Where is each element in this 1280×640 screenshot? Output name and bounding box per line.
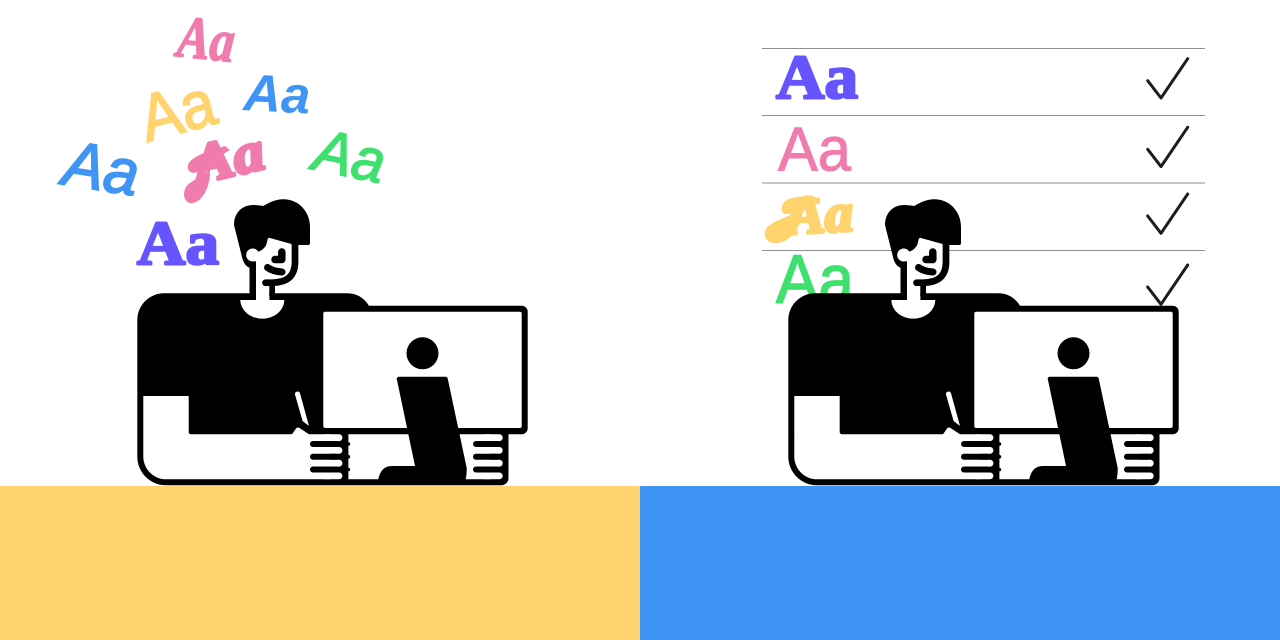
monitor screen: [974, 312, 1173, 428]
ear: [246, 248, 259, 262]
sample: yellow sans: Aa: [131, 65, 223, 156]
sample: blue italic: Aa: [55, 126, 144, 210]
mouth: [918, 268, 933, 272]
right color band: [640, 486, 1280, 640]
neck outline: [900, 262, 907, 296]
stylus: [295, 392, 309, 426]
desk gap: [348, 434, 490, 479]
floating font samples: [55, 3, 391, 278]
collar neck opening: [256, 296, 269, 302]
monitor stand: [1029, 377, 1118, 485]
right hand finger gaps: [1127, 444, 1148, 470]
left hand fingers: [976, 438, 990, 476]
left hand finger gaps: [313, 444, 336, 470]
face and neck: [253, 238, 292, 301]
person at computer, left: [137, 199, 528, 485]
person at computer, right: [788, 199, 1179, 485]
left hand finger gaps: [964, 444, 987, 470]
right hand fingers: [1136, 438, 1150, 476]
row 2 sample pink: Aa: [778, 116, 851, 184]
row 4 sample green: Aa: [776, 241, 855, 318]
collar: [891, 300, 935, 319]
left hand fingers: [325, 438, 339, 476]
row dividers: [762, 48, 1205, 250]
neck right outline: [269, 284, 275, 296]
body and monitor silhouette: [788, 293, 1179, 485]
neck right outline: [920, 284, 926, 296]
knuckle scallops: [998, 442, 1001, 471]
stylus: [946, 392, 960, 426]
sample: top pink rough: Aa: [171, 3, 238, 75]
check marks: [1148, 59, 1188, 304]
desk gap: [999, 434, 1141, 479]
monitor logo circle: [1058, 337, 1090, 369]
arm: [794, 396, 981, 479]
row 1 sample purple: Aa: [776, 44, 858, 112]
nose: [275, 252, 282, 260]
neck outline: [250, 262, 256, 296]
monitor logo circle: [406, 337, 438, 369]
mouth: [268, 268, 282, 272]
monitor screen: [323, 312, 522, 428]
left color band: [0, 486, 640, 640]
font list: [762, 44, 1205, 318]
ear: [897, 248, 910, 262]
monitor stand: [378, 377, 467, 485]
jaw line: [916, 244, 946, 283]
right hand finger gaps: [476, 444, 497, 470]
collar neck opening: [907, 296, 920, 302]
nose: [926, 252, 933, 260]
sample: purple slab: Aa: [137, 210, 219, 278]
collar: [240, 300, 284, 319]
right hand fingers: [485, 438, 499, 476]
sample: green italic: Aa: [306, 116, 391, 196]
jaw line: [266, 244, 295, 283]
sample: scratchy blue: Aa: [240, 64, 312, 125]
arm: [143, 396, 330, 479]
face and neck: [904, 238, 942, 301]
body and monitor silhouette: [137, 293, 528, 485]
knuckle scallops: [347, 442, 350, 471]
hair: [885, 199, 961, 268]
hair: [234, 199, 310, 268]
sample: fat pink retro: Aa: [183, 120, 270, 197]
row 3 sample yellow: Aa: [782, 183, 855, 246]
